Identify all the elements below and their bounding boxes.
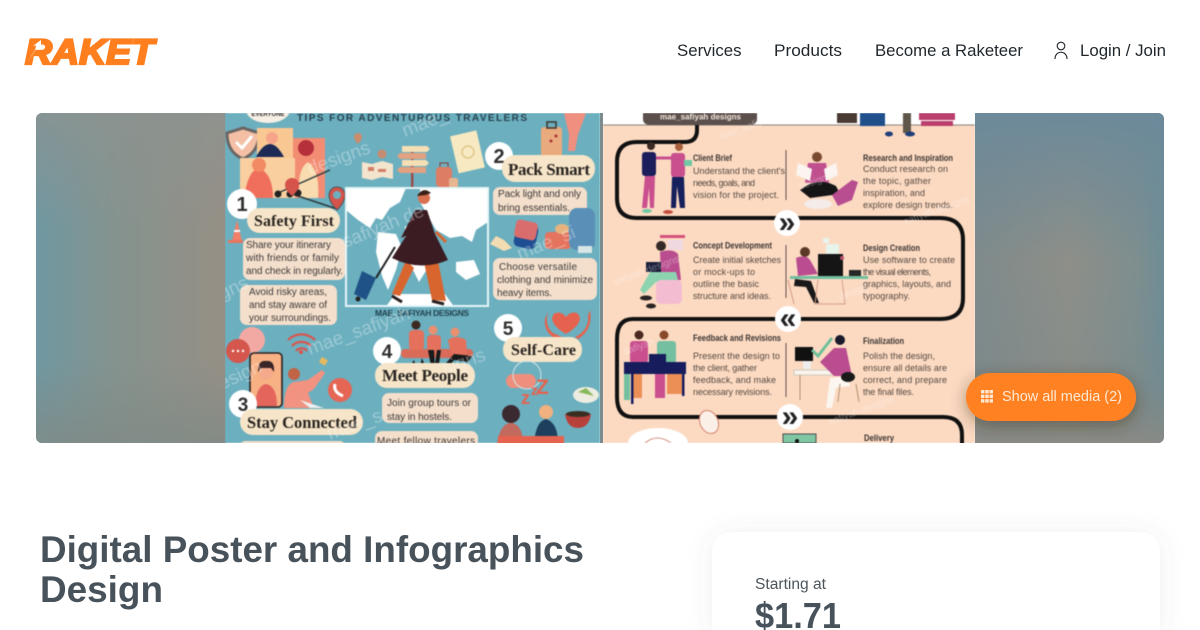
text box: meet fellow travelers <box>375 431 478 451</box>
text: delivery: Delivery <box>864 433 895 444</box>
text box: join group tours <box>382 393 478 423</box>
number badge 1: 1 <box>236 194 248 216</box>
poster: design process <box>603 112 975 455</box>
nav link: Services: Services <box>677 41 742 60</box>
watermarks: design <box>797 172 829 193</box>
heading pill: Self-Care <box>503 337 582 362</box>
text: research and inspiration: Conduct research on <box>863 164 948 174</box>
icon: phone call <box>328 378 352 402</box>
watermarks: mae_si <box>514 222 579 265</box>
step: design creation <box>788 238 955 304</box>
title <box>40 529 584 610</box>
text: finalization: Polish the design, <box>863 351 935 361</box>
text box: pack light: bring essentials. <box>498 203 570 214</box>
watermarks: mae_ <box>399 104 451 142</box>
number badge 4: 4 <box>382 342 393 363</box>
illustration: cropped circle and mark <box>628 407 722 443</box>
text box: avoid risky areas: and stay aware of <box>249 300 327 311</box>
icon: grid <box>981 390 993 403</box>
heading pill: Pack Smart: Pack Smart <box>508 160 590 179</box>
text: client brief: Understand the client's <box>693 166 786 176</box>
heading pill: Pack Smart <box>502 155 595 182</box>
chevron button 2 <box>775 302 801 335</box>
icon: small pin <box>354 133 362 144</box>
figure: traveler <box>354 190 448 304</box>
text: feedback and revisions: the client, gather <box>693 363 757 373</box>
heading pill: Meet People <box>375 363 475 388</box>
watermarks: esign <box>215 356 265 395</box>
heading pill: Safety First: Safety First <box>254 213 335 230</box>
chevron button 3 <box>777 400 803 433</box>
text box: share itinerary: and check in regularly. <box>246 266 343 277</box>
text: client brief: Client Brief <box>693 153 733 164</box>
watermarks: gns <box>215 273 252 305</box>
heading pill: Self-Care: Self-Care <box>511 342 576 359</box>
illustration: packing items <box>490 208 595 253</box>
illustration: phone with video call <box>250 353 282 407</box>
illustration: woman taking selfie <box>284 357 328 408</box>
text: concept development <box>693 240 782 301</box>
text box: avoid risky areas: Avoid risky areas, <box>249 287 327 298</box>
chevron button 1: » <box>779 206 795 239</box>
chevron button 1 <box>774 206 800 239</box>
navigation <box>677 41 1166 60</box>
number badge 4 <box>373 337 401 365</box>
icon: heart in hands <box>545 310 591 339</box>
illustration: food bowls <box>565 387 599 428</box>
icon: map pin <box>329 187 345 210</box>
text box: share itinerary: Share your itinerary <box>246 240 331 251</box>
number badge 3: 3 <box>238 395 248 416</box>
text: design creation: graphics, layouts, and <box>863 279 951 289</box>
step: client brief <box>642 142 786 214</box>
illustration: designer at desk <box>788 238 868 304</box>
text: finalization: correct, and prepare <box>863 375 947 385</box>
watermarks: design <box>837 282 869 303</box>
title: Digital Poster and Infographics <box>40 529 584 570</box>
frame: world map <box>346 188 488 306</box>
text: research and inspiration: the topic, gather <box>863 176 931 186</box>
text: research and inspiration: Research and Inspiration <box>863 153 953 164</box>
blurred backdrop left <box>36 113 226 443</box>
text box: join group tours: Join group tours or <box>387 398 472 409</box>
icon: user <box>1055 42 1067 59</box>
text box: choose versatile <box>493 258 597 300</box>
illustration: paper map <box>362 150 393 180</box>
illustration: sleeping mask and zzz: z <box>521 388 530 408</box>
text: feedback and revisions: feedback, and make <box>693 375 776 385</box>
text box: choose versatile: clothing and minimize <box>497 275 593 286</box>
heading pill: Meet People: Meet People <box>382 366 468 385</box>
watermarks: signs <box>440 345 488 380</box>
badge: everyone: EVERYONE <box>251 112 285 118</box>
pricing card <box>712 532 1160 630</box>
label: starting at: Starting at <box>755 576 827 593</box>
media gallery hero <box>36 97 1165 455</box>
text box: avoid risky areas <box>240 285 337 325</box>
text box: join group tours: stay in hostels. <box>387 412 452 423</box>
icon: traffic cone <box>228 220 243 243</box>
logo: RAKET: RAKET <box>25 33 157 72</box>
illustration: passport <box>450 130 485 173</box>
text box: share itinerary <box>243 238 345 280</box>
chevron button 3: » <box>782 400 798 433</box>
number badge 2 <box>485 142 513 170</box>
text: concept development: outline the basic <box>693 279 760 289</box>
section dividers <box>785 150 787 397</box>
watermarks <box>215 104 579 445</box>
text: research and inspiration <box>863 153 953 210</box>
watermarks <box>612 113 971 428</box>
text box: choose versatile: Choose versatile <box>499 262 577 273</box>
illustration: two people at desk <box>624 330 686 404</box>
heading pill: Stay Connected: Stay Connected <box>247 413 357 432</box>
badge: everyone <box>246 113 290 124</box>
text box: meet fellow travelers: Meet fellow travelers <box>377 436 475 447</box>
icon: chat bubbles <box>226 327 265 363</box>
text: client brief <box>693 153 786 200</box>
text box: choose versatile: heavy items. <box>497 288 552 299</box>
illustration: leg <box>564 113 586 151</box>
illustration: world map with traveler <box>346 188 488 308</box>
divider between posters <box>600 113 603 443</box>
illustration: cropped figure top <box>837 113 955 136</box>
step: research and inspiration <box>796 152 953 210</box>
text box: pack light: Pack light and only <box>498 189 581 200</box>
text: feedback and revisions: Present the design to <box>693 351 780 361</box>
text: design creation <box>863 243 955 301</box>
text: feedback and revisions: Feedback and Revisions <box>693 333 781 344</box>
heading pill: Safety First <box>247 208 340 233</box>
process path line <box>617 125 963 455</box>
poster: tips for adventurous travelers <box>215 97 600 451</box>
text box: avoid risky areas: your surroundings. <box>249 313 331 324</box>
text: finalization: Finalization <box>863 336 904 347</box>
text: finalization: ensure all details are <box>863 363 947 373</box>
icon: shield <box>227 128 259 159</box>
illustration: signpost <box>397 146 430 188</box>
illustration: sleeping mask and zzz: Z <box>536 376 549 399</box>
nav link: Products: Products <box>774 41 842 60</box>
number badge 5: 5 <box>503 319 514 340</box>
button label: Show all media (2) <box>1002 389 1122 405</box>
illustration: sleeping mask and zzz: z <box>531 382 538 398</box>
heading pill: Stay Connected <box>240 409 363 435</box>
text: research and inspiration: explore design trends. <box>863 200 953 210</box>
watermarks: safiyah designs <box>827 394 896 428</box>
text: research and inspiration: inspiration, and <box>863 188 925 198</box>
text box: cropped <box>240 441 345 451</box>
poster title: TIPS FOR ADVENTUROUS TRAVELERS <box>297 113 527 124</box>
step: concept development <box>640 235 782 308</box>
illustration: person reading <box>796 152 858 209</box>
illustration: group of people <box>401 320 473 370</box>
tag: mae_safiyah designs: mae_safiyah designs <box>660 112 742 122</box>
tag: mae_safiyah designs <box>643 112 757 125</box>
watermarks: safiyah designs <box>612 254 681 288</box>
nav link: Login / Join: Login / Join <box>1080 41 1166 60</box>
step: feedback and revisions <box>624 330 781 404</box>
icon: wifi <box>288 334 315 353</box>
title: Design <box>40 569 163 610</box>
watermarks: mae_s <box>325 405 385 445</box>
button: show all media <box>966 373 1136 421</box>
illustration: two people shaking hands <box>642 142 692 214</box>
chevron button 2: « <box>780 302 796 335</box>
watermarks: mae_safiyah <box>305 303 413 360</box>
illustration: delivery screen <box>783 434 816 443</box>
text box: share itinerary: with friends or family <box>245 253 339 264</box>
step: finalization <box>794 335 947 408</box>
text: client brief: needs, goals, and <box>693 178 755 188</box>
text: design creation: Use software to create <box>863 255 955 265</box>
text: concept development: Create initial sketches <box>693 255 782 265</box>
text: feedback and revisions: necessary revisions. <box>693 387 772 397</box>
text: concept development: Concept Development <box>693 240 773 252</box>
step: delivery <box>783 433 895 444</box>
illustration: photo collage <box>240 128 337 209</box>
number badge 5 <box>494 314 522 342</box>
text: design creation: Design Creation <box>863 243 920 254</box>
text box: pack light <box>493 187 587 215</box>
text: finalization: the final files. <box>863 387 914 397</box>
watermarks: safiyah de <box>339 201 427 253</box>
illustration: backpack <box>436 163 458 188</box>
watermarks: designs <box>305 138 373 180</box>
caption: MAE_SAFIYAH DESIGNS: MAE_SAFIYAH DESIGNS <box>375 308 469 318</box>
text: concept development: or mock-ups to <box>693 267 755 277</box>
number badge 2: 2 <box>493 146 505 168</box>
text: feedback and revisions <box>693 333 781 397</box>
text: design creation: typography. <box>863 291 910 301</box>
text: design creation: the visual elements, <box>863 267 931 277</box>
watermarks: safiyah designs <box>902 194 971 228</box>
blurred backdrop right <box>975 113 1165 443</box>
illustration: people relaxing <box>497 405 564 444</box>
illustration: person at computer <box>794 335 859 408</box>
watermarks: safiyah <box>622 337 656 358</box>
nav link: Become a Raketeer: Become a Raketeer <box>875 41 1023 60</box>
text: finalization <box>863 336 947 397</box>
illustration: sleeping mask and zzz <box>506 361 549 408</box>
text: concept development: structure and ideas. <box>693 291 771 301</box>
number badge 3 <box>229 390 257 418</box>
illustration: person with laptop <box>640 235 685 308</box>
watermarks: mae_safiyah <box>717 113 774 143</box>
number badge 1 <box>227 189 257 219</box>
illustration: suitcase <box>541 122 562 158</box>
text: client brief: vision for the project. <box>693 190 779 200</box>
